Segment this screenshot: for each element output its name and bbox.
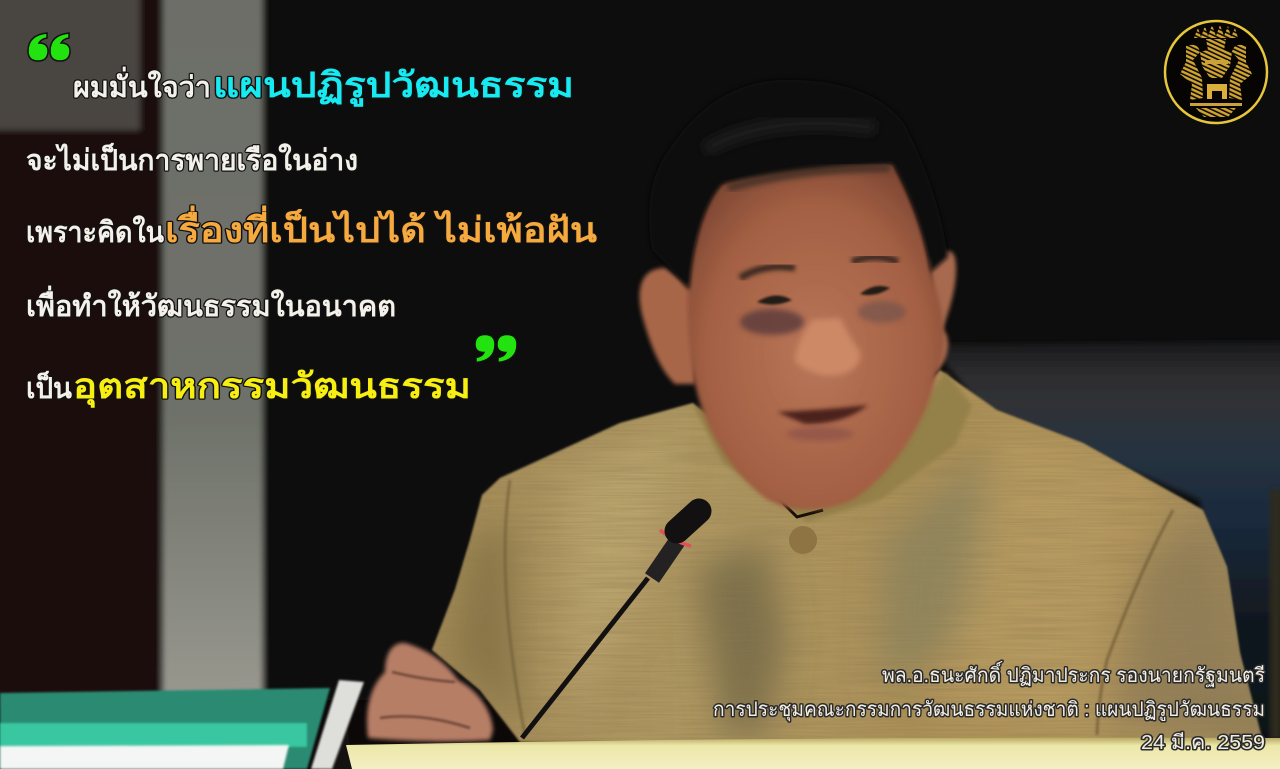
- photo: speaker: [367, 80, 1280, 750]
- caption: meeting: การประชุมคณะกรรมการวัฒนธรรมแห่งชาติ : แผนปฏิรูปวัฒนธรรม: [713, 699, 1265, 722]
- desk: cream nameplate: [346, 738, 1280, 769]
- seal: pedestal: [1207, 84, 1227, 99]
- opening quote mark: [28, 33, 70, 61]
- jacket: [420, 360, 1280, 750]
- government seal: [1165, 21, 1267, 123]
- seal: flames: [1194, 25, 1238, 38]
- face: [688, 163, 944, 510]
- seal: left lion: [1180, 45, 1203, 100]
- office chair: [930, 342, 1280, 760]
- quote line 5: เป็น: [26, 370, 72, 405]
- ears: [640, 251, 956, 384]
- closing quote mark: [475, 334, 517, 362]
- hand: [367, 643, 493, 741]
- microphone: [522, 511, 699, 738]
- quote line 5 highlight: อุตสาหกรรมวัฒนธรรม: [73, 367, 471, 408]
- quote line 1: ผมมั่นใจว่า: [73, 66, 211, 104]
- caption: name and title: พล.อ.ธนะศักดิ์ ปฏิมาประกร รองนายกรัฐมนตรี: [882, 660, 1265, 687]
- collar: [693, 372, 972, 522]
- desk: green folder and papers: [0, 680, 364, 769]
- facial features: [740, 257, 906, 441]
- seal: right lion: [1229, 45, 1252, 100]
- quote line 2: จะไม่เป็นการพายเรือในอ่าง: [26, 142, 358, 177]
- hair: [649, 80, 948, 290]
- seal: urn: [1200, 39, 1232, 78]
- quote line 3 highlight: เรื่องที่เป็นไปได้ ไม่เพ้อฝัน: [165, 205, 597, 250]
- caption: date: 24 มี.ค. 2559: [1141, 732, 1265, 754]
- quote line 3: เพราะคิดใน: [26, 215, 164, 249]
- quote line 1 highlight: แผนปฏิรูปวัฒนธรรม: [213, 66, 574, 107]
- quote line 4: เพื่อทำให้วัฒนธรรมในอนาคต: [26, 285, 396, 323]
- caption: [713, 660, 1265, 754]
